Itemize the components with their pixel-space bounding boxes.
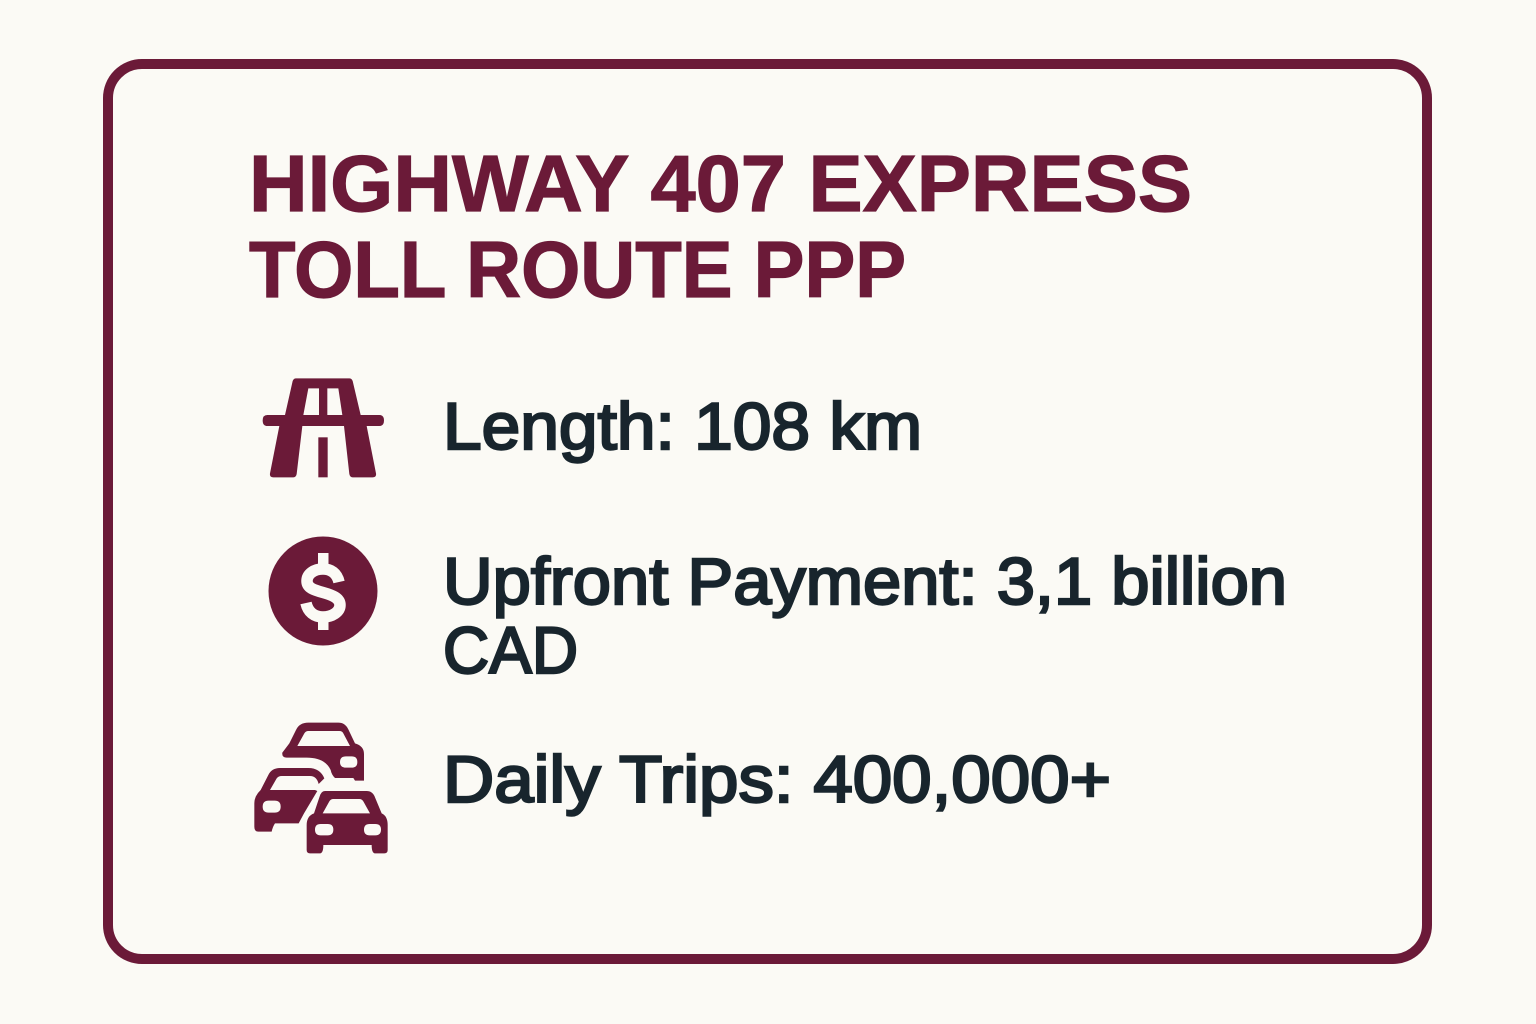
- title: [249, 139, 1192, 314]
- panel: rounded card border: [108, 64, 1427, 959]
- text: daily trips: Daily Trips: 400,000+: [443, 742, 1111, 816]
- front car: [307, 791, 388, 853]
- icon: highway: [263, 378, 384, 477]
- icon: traffic cars: [254, 723, 388, 853]
- text: length: Length: 108 km: [443, 389, 922, 463]
- title: HIGHWAY 407 EXPRESS: [249, 139, 1192, 228]
- text: upfront payment: [443, 544, 1287, 687]
- road centre dash: [318, 437, 328, 477]
- icon: dollar coin: [268, 536, 378, 646]
- text: upfront payment: Upfront Payment: 3,1 billion: [443, 544, 1287, 618]
- rear car: [282, 723, 364, 781]
- left car: [254, 768, 324, 832]
- title: TOLL ROUTE PPP: [249, 225, 906, 314]
- text: upfront payment: CAD: [443, 613, 578, 687]
